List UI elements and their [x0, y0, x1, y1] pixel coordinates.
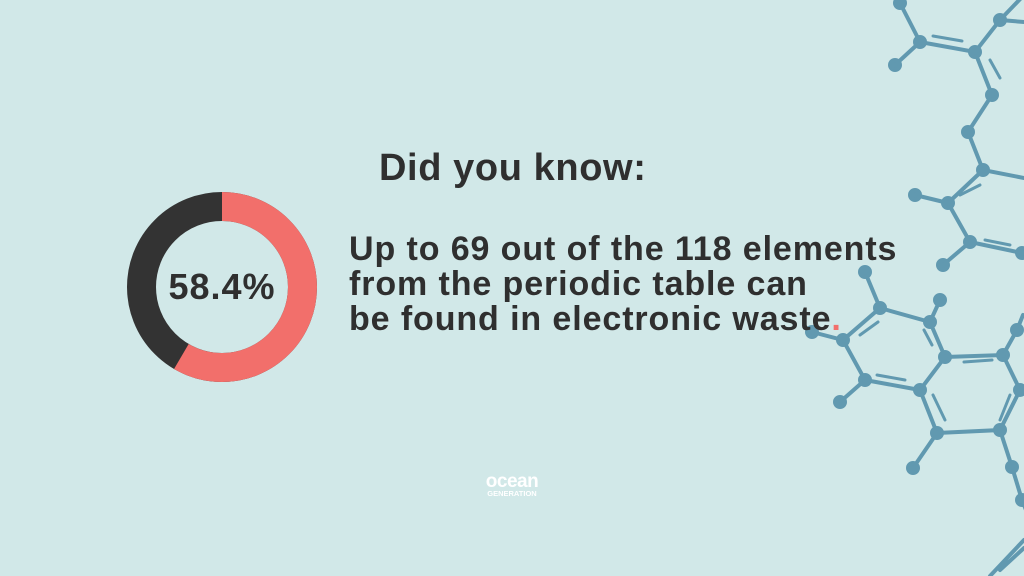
- donut label: 58.4%: [168, 266, 276, 307]
- body text: be found in electronic waste.: [349, 300, 842, 338]
- logo: Ocean Generation: ocean: [486, 471, 538, 492]
- body text: Up to 69 out of the 118 elements: [349, 230, 897, 268]
- body text: [349, 230, 897, 338]
- title: Did you know:: [379, 147, 646, 189]
- body text: from the periodic table can: [349, 265, 808, 303]
- logo: Ocean Generation: GENERATION: [487, 489, 537, 498]
- donut chart 58.4%: [127, 192, 317, 382]
